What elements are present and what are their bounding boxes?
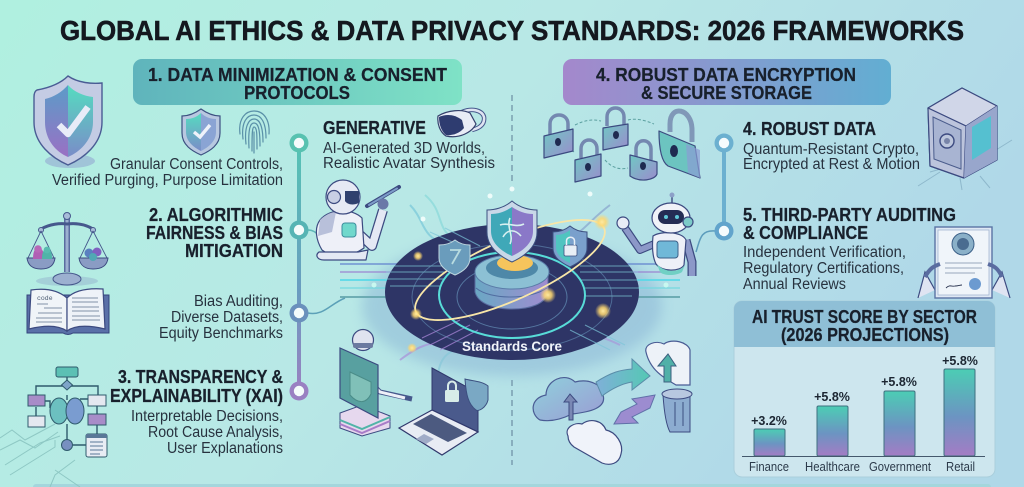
panel heading: section 1: 1. DATA MINIMIZATION & CONSENT [148, 65, 447, 85]
left small shield [439, 240, 470, 275]
bar: Finance [749, 414, 789, 474]
bar: Healthcare [805, 390, 860, 474]
heading: algorithmic fairness: FAIRNESS & BIAS [146, 223, 283, 243]
icon: code book [27, 289, 109, 334]
text: robust data: 4. ROBUST DATA [743, 119, 876, 139]
icon: code book: code [37, 295, 53, 302]
text: generative: AI-Generated 3D Worlds, [323, 140, 485, 157]
text: robust data [743, 119, 920, 173]
icon: certificate [918, 227, 1010, 298]
panel heading: section 4 [563, 59, 891, 105]
text: bias auditing: Equity Benchmarks [159, 325, 283, 342]
text: robust data: Encrypted at Rest & Motion [743, 156, 920, 173]
central shield [487, 201, 537, 262]
text: interpretable decisions: User Explanations [167, 440, 283, 457]
text: granular consent: Granular Consent Controls, [110, 156, 283, 173]
bar: Finance: Finance [749, 459, 789, 474]
text: bias auditing: Bias Auditing, [194, 293, 283, 310]
text: generative [323, 118, 495, 172]
illustration: standards core platform [340, 186, 680, 376]
illustration: clouds, arrows and trash [533, 341, 692, 464]
orbit [404, 201, 616, 339]
icon: flowchart brain [0, 367, 107, 487]
text: bias auditing: Diverse Datasets, [171, 309, 283, 326]
panel heading: section 4: 4. ROBUST DATA ENCRYPTION [596, 65, 856, 85]
left timeline [290, 134, 345, 400]
bar: Finance: +3.2% [751, 414, 787, 428]
bar: Government: Government [869, 459, 931, 474]
text: generative: Realistic Avatar Synthesis [323, 155, 495, 172]
heading: transparency: EXPLAINABILITY (XAI) [110, 386, 283, 406]
heading: transparency [110, 367, 283, 406]
text: third-party auditing: Annual Reviews [743, 276, 846, 293]
glowing nodes [372, 186, 668, 353]
title: GLOBAL AI ETHICS & DATA PRIVACY STANDARDS: 2026 FRAMEWORKS [60, 15, 964, 46]
text: interpretable decisions [131, 408, 283, 457]
bottom strip [33, 484, 991, 487]
icon: safe [918, 88, 1012, 190]
text: third-party auditing: Regulatory Certifications, [743, 260, 904, 277]
icon: VR headset [438, 110, 484, 137]
heading: algorithmic fairness: MITIGATION [185, 241, 283, 261]
chart title [752, 307, 977, 345]
text: interpretable decisions: Interpretable Decisions, [131, 408, 283, 425]
bar: Healthcare: +5.8% [814, 390, 850, 404]
center dashed divider [511, 95, 513, 465]
pedestal [475, 272, 548, 309]
bar: Retail [942, 354, 978, 474]
text: third-party auditing: Independent Verification, [743, 244, 906, 261]
icon: scales [27, 212, 108, 286]
heading: transparency: 3. TRANSPARENCY & [118, 367, 283, 387]
text: third-party auditing: & COMPLIANCE [743, 223, 868, 243]
bar: Retail: +5.8% [942, 354, 978, 368]
text: interpretable decisions: Root Cause Analysis, [148, 424, 283, 441]
icon: fingerprint [240, 111, 269, 153]
right timeline [696, 134, 734, 252]
chart title: AI TRUST SCORE BY SECTOR [752, 307, 977, 327]
text: third-party auditing: 5. THIRD-PARTY AUDITING [743, 205, 956, 225]
bar: Government [869, 375, 931, 474]
icon: large shield [34, 76, 102, 168]
panel heading: section 1: PROTOCOLS [244, 83, 350, 103]
text: robust data: Quantum-Resistant Crypto, [743, 141, 919, 158]
heading: algorithmic fairness [146, 205, 283, 261]
chart title: (2026 PROJECTIONS) [781, 325, 949, 345]
bar: Government: +5.8% [881, 375, 917, 389]
text: generative: GENERATIVE [323, 118, 426, 138]
label: Standards Core [462, 339, 562, 354]
bar: Healthcare: Healthcare [805, 459, 860, 474]
panel: AI trust score bar chart [734, 301, 995, 477]
heading: algorithmic fairness: 2. ALGORITHMIC [149, 205, 283, 225]
light rays [340, 195, 680, 375]
panel heading: section 4: & SECURE STORAGE [641, 83, 812, 103]
panel heading: section 1 [133, 59, 462, 105]
bar: Retail: Retail [946, 459, 975, 474]
illustration: laptop [399, 368, 488, 455]
icon: small shield [182, 109, 220, 155]
text: granular consent: Verified Purging, Purpose Limitation [52, 172, 283, 189]
text: bias auditing [159, 293, 283, 342]
text: third-party auditing [743, 205, 956, 293]
illustration: robot with pen [316, 180, 399, 260]
illustration: robot waving [617, 192, 693, 276]
illustration: robot at shield screen [340, 330, 412, 436]
icon: padlocks [544, 108, 700, 182]
right lock shield [553, 226, 587, 267]
text: granular consent [52, 156, 283, 189]
